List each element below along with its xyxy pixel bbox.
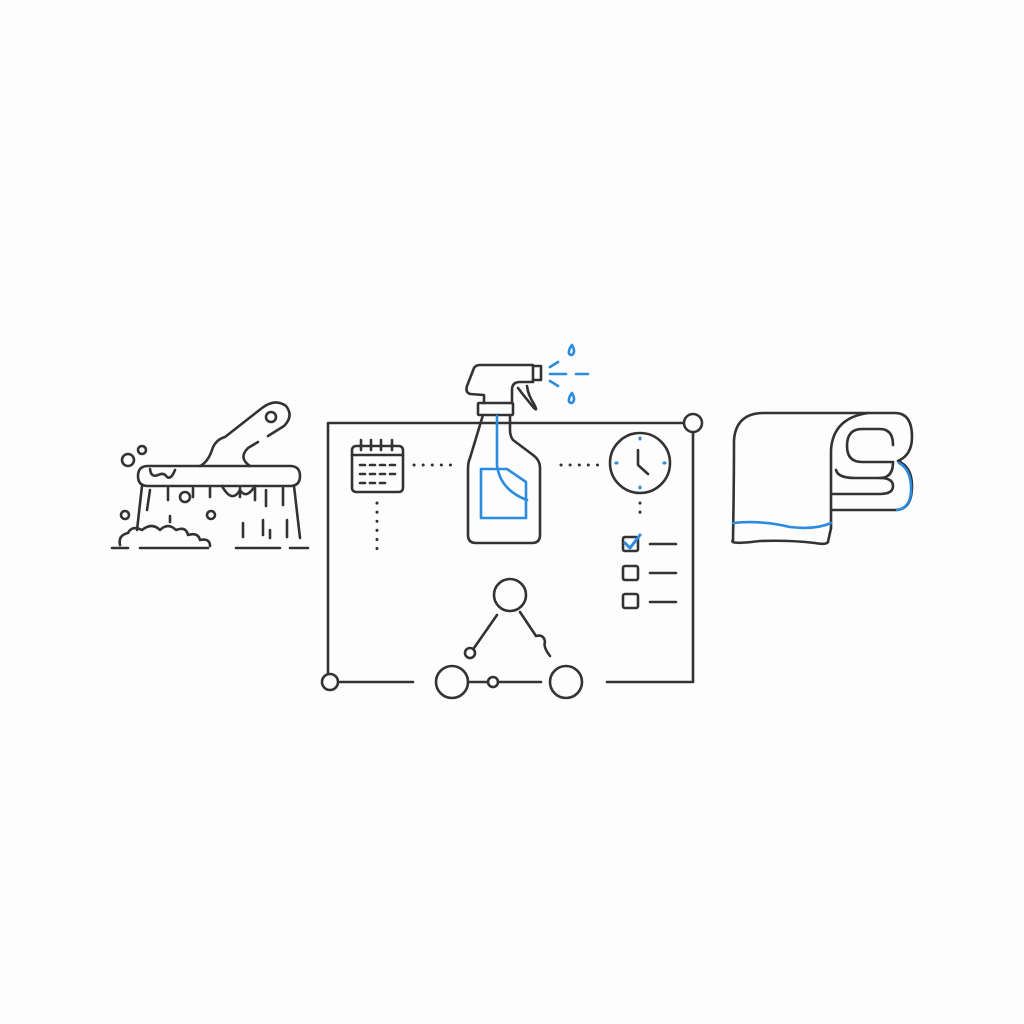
icon: network nodes: [436, 579, 582, 698]
icon: calendar: [352, 440, 403, 492]
icon: clock: [610, 433, 670, 493]
icon: towel: [732, 413, 912, 544]
connector dots: [377, 465, 640, 552]
icon: spray bottle: [466, 365, 541, 543]
panel: frame: [322, 414, 702, 690]
icon: scrub brush: [112, 402, 308, 548]
icon: spray droplets: [550, 345, 588, 403]
icon: checklist: [623, 535, 676, 608]
